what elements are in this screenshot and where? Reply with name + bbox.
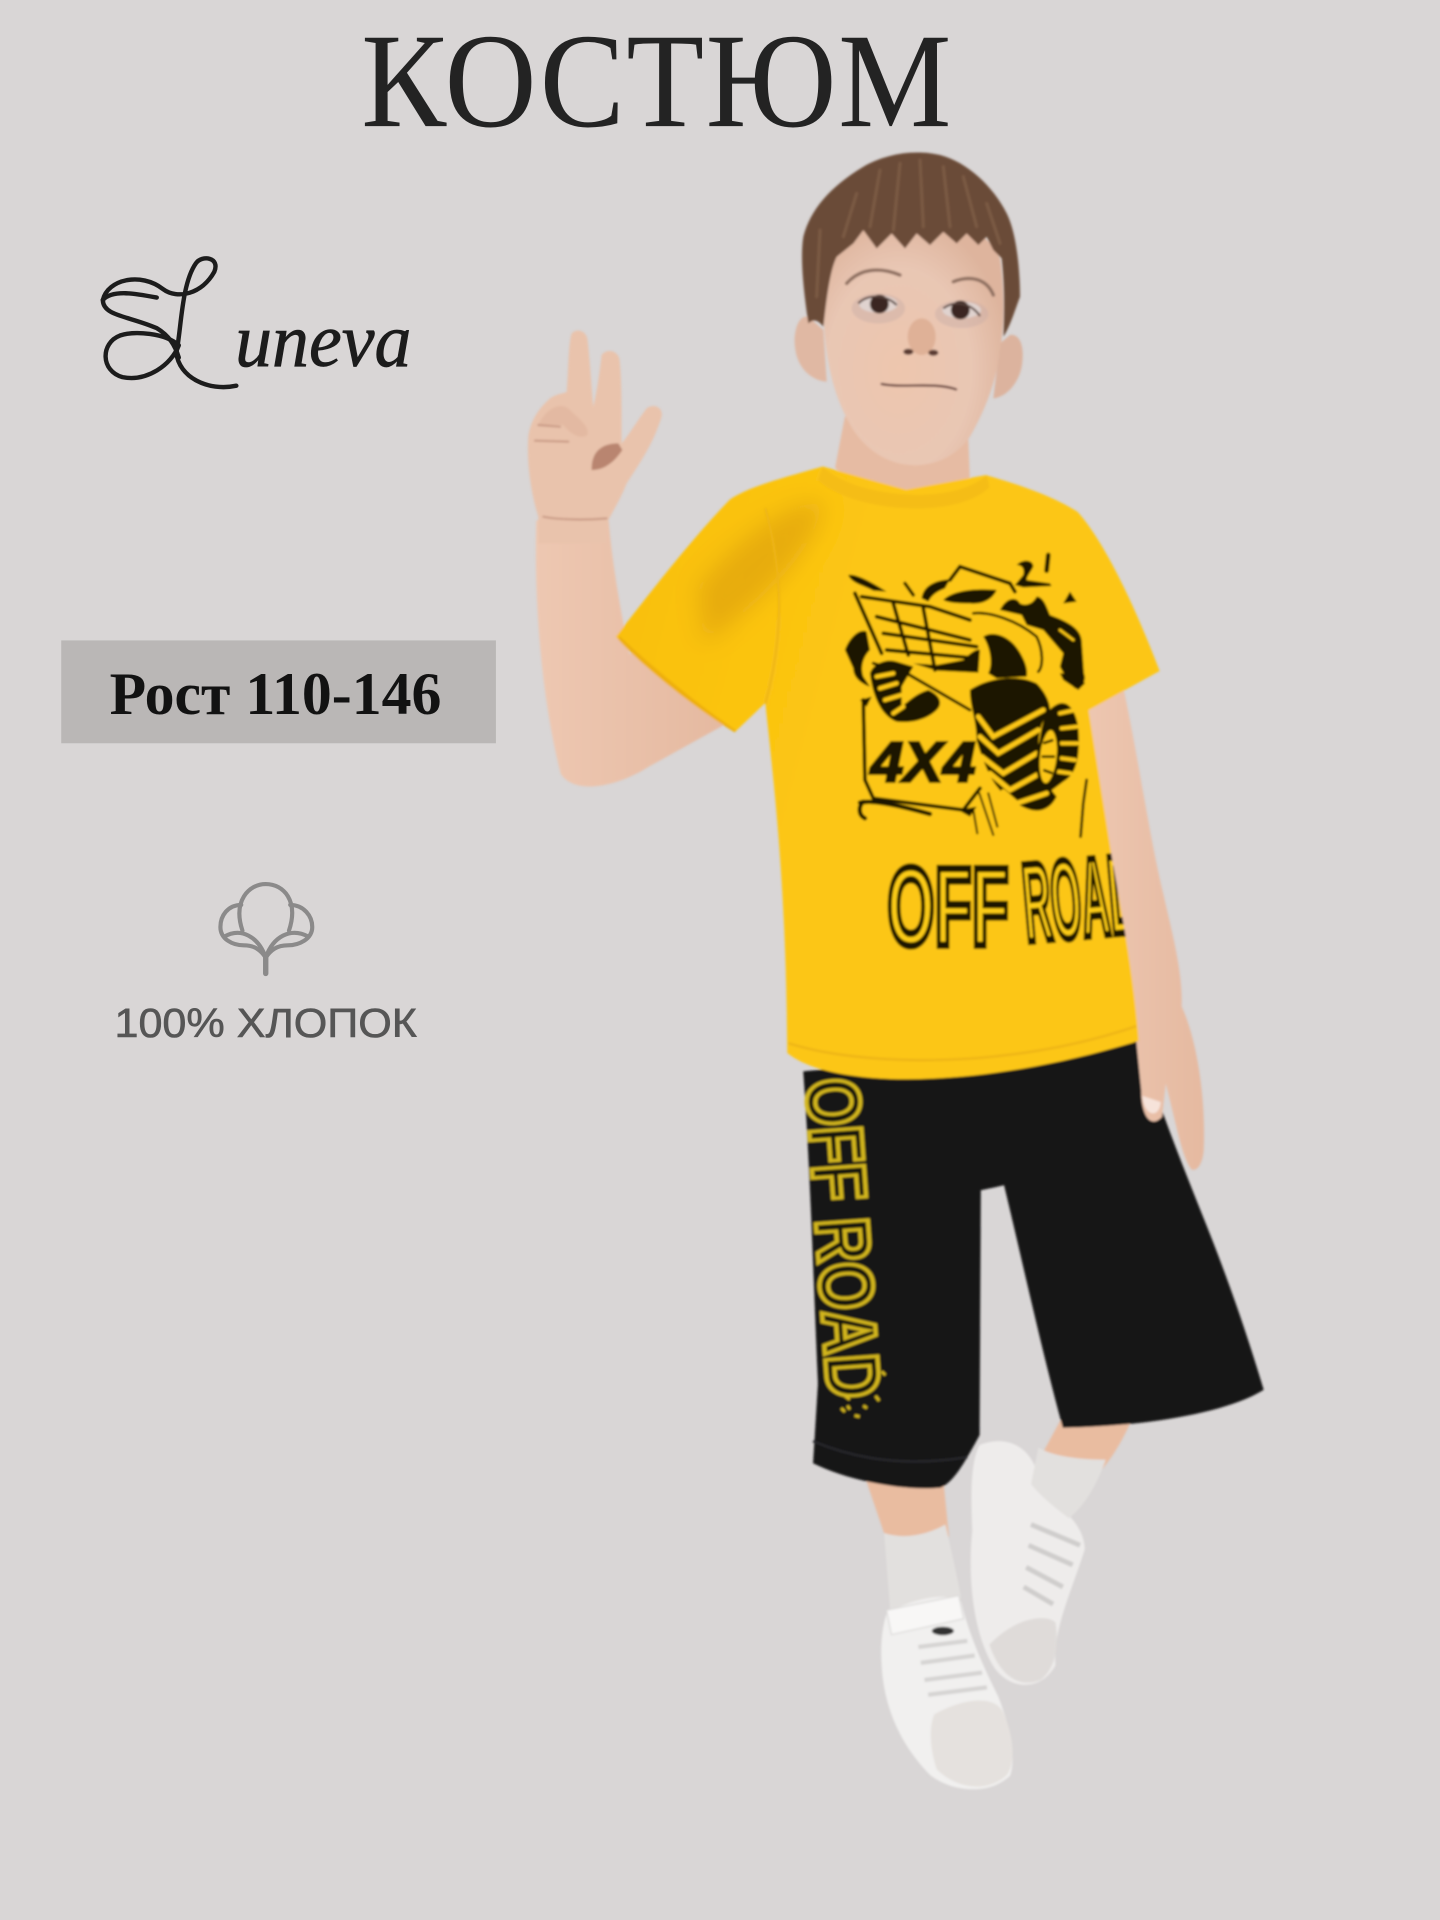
logo: Luneva	[103, 258, 411, 387]
shorts print: OFF ROAD	[789, 1075, 896, 1401]
front shoe	[881, 1596, 1013, 1789]
t-shirt print: monster truck	[845, 555, 1087, 837]
rear shoe	[971, 1441, 1085, 1685]
raised arm and hand	[528, 331, 729, 786]
neck	[835, 416, 970, 494]
material label: 100% ХЛОПОК	[114, 1000, 417, 1046]
boy in yellow t-shirt and black shorts: ROAD	[1018, 831, 1142, 966]
t-shirt print: monster truck: 4X4	[870, 732, 976, 795]
boy in yellow t-shirt and black shorts	[528, 152, 1264, 1789]
t-shirt print: OFF ROAD: OFF	[887, 844, 1009, 969]
logo: Luneva: L	[183, 365, 185, 367]
height badge	[61, 640, 496, 743]
shorts	[803, 1041, 1264, 1488]
lowered arm and hand	[1078, 680, 1204, 1170]
height badge: Рост 110-146	[110, 661, 441, 727]
t-shirt	[616, 467, 1160, 1079]
icon: cotton boll	[220, 884, 312, 973]
legs and socks	[864, 1418, 1133, 1611]
title: КОСТЮМ	[361, 7, 951, 156]
head	[795, 152, 1023, 465]
logo: Luneva: uneva	[235, 299, 411, 383]
